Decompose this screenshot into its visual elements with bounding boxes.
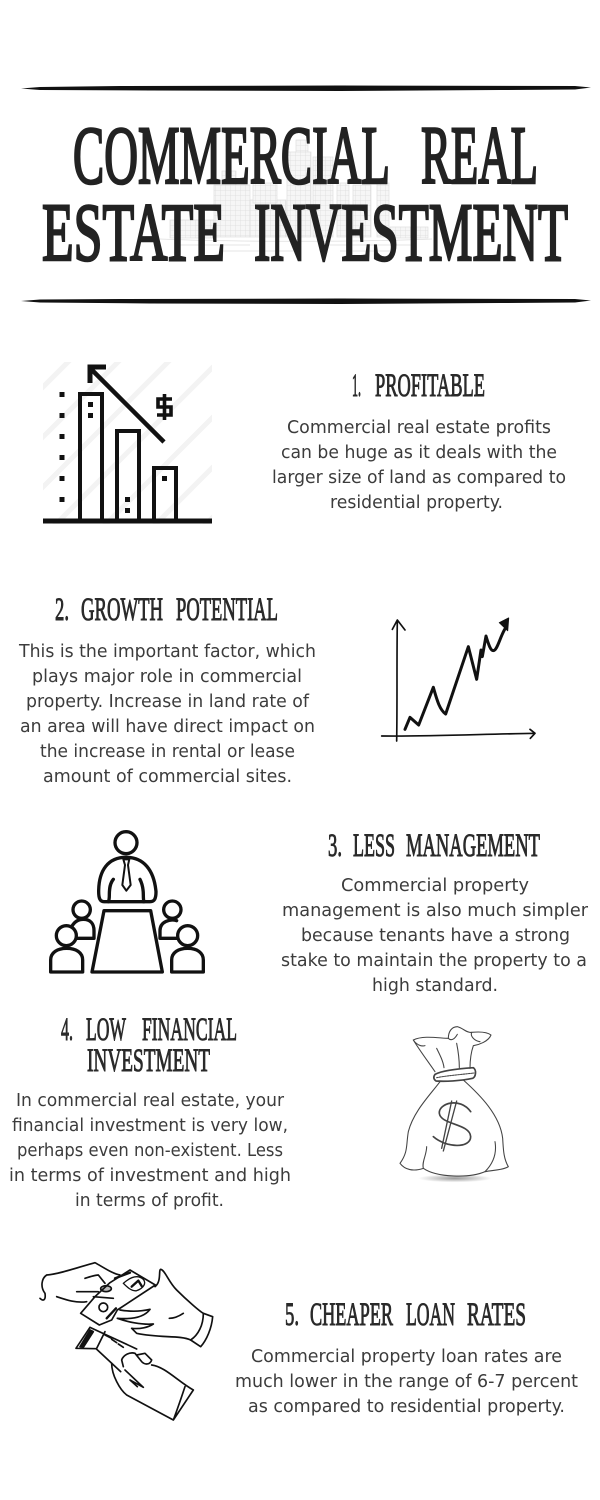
- icon: bar chart with arrow and dollar: [43, 362, 212, 524]
- body text: [281, 876, 589, 996]
- panel: 5 cheaper loan rates: [40, 1263, 578, 1420]
- heading: PROFITABLE: [375, 368, 485, 404]
- heading: POTENTIAL: [176, 592, 278, 628]
- body text: much lower in the range of 6-7 percent: [235, 1372, 578, 1392]
- heading: [55, 592, 278, 628]
- body text: can be huge as it deals with the: [281, 443, 557, 463]
- body text: In commercial real estate, your: [16, 1091, 285, 1111]
- panel: 2 growth potential: [18, 592, 535, 787]
- body text: Commercial real estate profits: [287, 418, 551, 438]
- panel: 3 less management: [51, 828, 589, 996]
- body text: the increase in rental or lease: [40, 742, 295, 762]
- heading: LESS: [353, 828, 395, 864]
- body text: in terms of profit.: [75, 1191, 224, 1211]
- icon: hands exchanging money: [40, 1263, 213, 1420]
- body text: as compared to residential property.: [248, 1397, 565, 1417]
- heading: CHEAPER: [310, 1297, 393, 1333]
- skyline illustration behind title: [160, 140, 432, 251]
- body text: an area will have direct impact on: [20, 717, 315, 737]
- icon: meeting at table: [51, 832, 203, 972]
- body text: management is also much simpler: [282, 901, 589, 921]
- body text: amount of commercial sites.: [43, 767, 292, 787]
- heading: INVESTMENT: [87, 1043, 210, 1079]
- panel: 4 low financial investment: [9, 1012, 508, 1211]
- body text: plays major role in commercial: [32, 667, 302, 687]
- icon: rising line chart: [382, 618, 535, 741]
- heading: LOW: [86, 1012, 126, 1048]
- body text: perhaps even non-existent. Less: [17, 1141, 283, 1161]
- body text: financial investment is very low,: [12, 1116, 288, 1136]
- heading: 4.: [61, 1012, 73, 1048]
- icon: money bag: [400, 1027, 508, 1182]
- body text: in terms of investment and high: [9, 1166, 291, 1186]
- body text: high standard.: [372, 976, 498, 996]
- bottom brush rule: [21, 298, 591, 304]
- body text: because tenants have a strong: [301, 926, 570, 946]
- heading: 1.: [352, 368, 361, 404]
- body text: This is the important factor, which: [18, 642, 316, 662]
- body text: stake to maintain the property to a: [281, 951, 587, 971]
- body text: property. Increase in land rate of: [26, 692, 310, 712]
- heading: [328, 828, 540, 864]
- heading: [285, 1297, 526, 1333]
- title: [42, 109, 568, 278]
- heading: 5.: [285, 1297, 299, 1333]
- heading: FINANCIAL: [142, 1012, 237, 1048]
- body text: [272, 418, 566, 513]
- body text: [9, 1091, 291, 1211]
- title: ESTATE: [42, 186, 225, 278]
- heading: [61, 1012, 237, 1079]
- heading: RATES: [467, 1297, 526, 1333]
- header panel: [21, 86, 591, 304]
- body text: Commercial property loan rates are: [251, 1347, 562, 1367]
- top brush rule: [21, 86, 591, 91]
- body text: [235, 1347, 578, 1417]
- panel: 1 profitable: [43, 362, 566, 524]
- heading: GROWTH: [81, 592, 163, 628]
- body text: residential property.: [330, 493, 503, 513]
- body text: larger size of land as compared to: [272, 468, 566, 488]
- heading: LOAN: [406, 1297, 455, 1333]
- heading: [352, 368, 485, 404]
- body text: [18, 642, 316, 787]
- body text: Commercial property: [341, 876, 529, 896]
- heading: 3.: [328, 828, 342, 864]
- heading: 2.: [55, 592, 69, 628]
